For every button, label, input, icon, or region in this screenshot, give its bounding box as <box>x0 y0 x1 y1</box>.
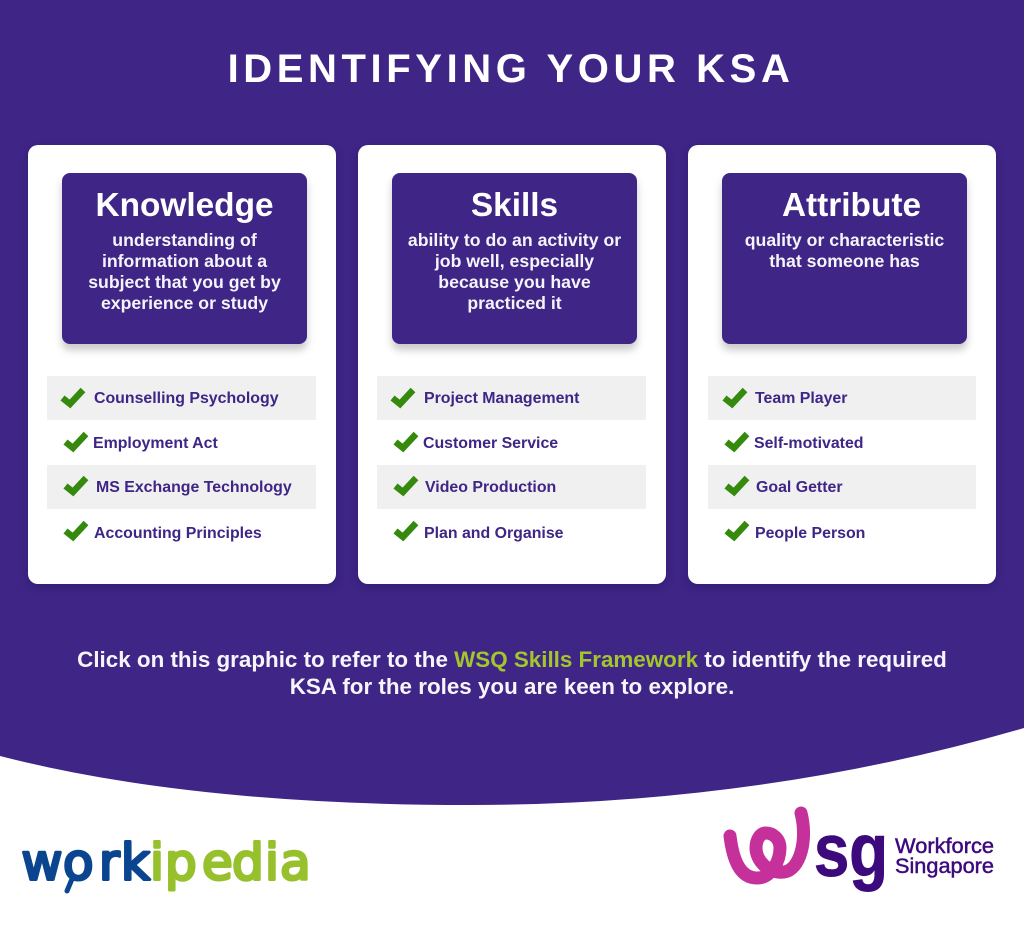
skills heading box: Skills <box>471 187 558 224</box>
panel: knowledge <box>28 145 336 584</box>
logo: workipedia <box>22 834 311 894</box>
logo: workipedia: work <box>22 834 150 892</box>
skills heading box <box>392 173 637 344</box>
item: Goal Getter: Goal Getter <box>756 479 843 496</box>
item: Accounting Principles <box>64 520 262 542</box>
attribute heading box: Attribute <box>782 187 921 224</box>
item: Counselling Psychology: Counselling Psychology <box>94 390 279 407</box>
panel: attribute <box>688 145 996 584</box>
attribute heading box <box>722 173 967 344</box>
logo: Workforce Singapore: Workforce <box>895 834 994 858</box>
item: Employment Act: Employment Act <box>93 435 218 452</box>
item: Goal Getter <box>708 465 976 509</box>
item: Project Management: Project Management <box>424 390 579 407</box>
call to action text: KSA for the roles you are keen to explore. <box>290 674 734 699</box>
logo: Workforce Singapore <box>724 806 994 892</box>
knowledge heading box: subject that you get by <box>88 272 281 292</box>
logo: Workforce Singapore: sg <box>814 809 888 892</box>
skills heading box: because you have <box>438 272 591 292</box>
knowledge heading box <box>62 173 307 344</box>
skills heading box: practiced it <box>467 293 562 313</box>
item: Customer Service: Customer Service <box>423 435 558 452</box>
item: Self-motivated <box>724 432 864 452</box>
item: Self-motivated: Self-motivated <box>754 435 864 452</box>
item: People Person: People Person <box>755 525 865 542</box>
skills heading box: ability to do an activity or <box>408 230 621 250</box>
title: IDENTIFYING YOUR KSA <box>228 47 794 91</box>
knowledge heading box: information about a <box>102 251 267 271</box>
item: Accounting Principles: Accounting Principles <box>94 525 262 542</box>
item: Team Player: Team Player <box>755 390 847 407</box>
item: Plan and Organise <box>394 520 564 542</box>
call to action text <box>77 647 947 699</box>
call to action text: Click on this graphic to refer to the WSQ Skills Framework to identify the required <box>77 647 947 672</box>
logo: workipedia: ipedia <box>150 834 311 892</box>
item: People Person <box>724 520 865 542</box>
logo: Workforce Singapore: Singapore <box>895 854 994 878</box>
knowledge heading box: experience or study <box>101 293 268 313</box>
knowledge heading box: understanding of <box>112 230 257 250</box>
knowledge heading box: Knowledge <box>95 187 274 224</box>
attribute heading box: quality or characteristic <box>745 230 944 250</box>
item: Team Player <box>708 376 976 420</box>
item: Project Management <box>377 376 646 420</box>
item: Video Production <box>377 465 646 509</box>
skills heading box: job well, especially <box>435 251 594 271</box>
item: Counselling Psychology <box>47 376 316 420</box>
panel: skills <box>358 145 666 584</box>
item: Customer Service <box>394 432 558 452</box>
item: Video Production: Video Production <box>425 479 556 496</box>
item: MS Exchange Technology: MS Exchange Technology <box>96 479 292 496</box>
item: Employment Act <box>64 432 218 452</box>
item: Plan and Organise: Plan and Organise <box>424 525 564 542</box>
item: MS Exchange Technology <box>47 465 316 509</box>
attribute heading box: that someone has <box>769 251 920 271</box>
